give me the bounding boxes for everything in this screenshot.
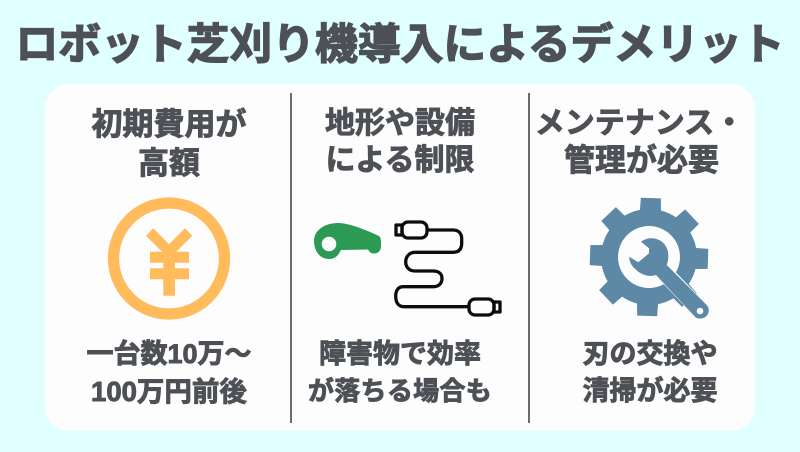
heading: initial cost: 初期費用が [92, 107, 246, 142]
text: obstacles: 障害物で効率 [319, 339, 481, 369]
heading: maintenance: メンテナンス・ [535, 107, 744, 140]
text: obstacles: が落ちる場合も [308, 376, 492, 406]
title: ロボット芝刈り機導入によるデメリット [15, 21, 785, 69]
heading: maintenance [535, 107, 744, 178]
text: price range [86, 338, 252, 407]
heading: terrain and equipment [325, 106, 475, 177]
icon: gear and wrench [590, 198, 709, 318]
heading: terrain and equipment: による制限 [325, 144, 475, 177]
panel: white card [45, 84, 755, 431]
column divider left [290, 93, 292, 423]
icon: yen coin [108, 197, 230, 320]
heading: maintenance: 管理が必要 [564, 143, 719, 178]
text: blade care [582, 339, 718, 406]
heading: initial cost: 高額 [138, 146, 200, 181]
heading: terrain and equipment: 地形や設備 [325, 107, 475, 140]
text: blade care: 刃の交換や [582, 339, 718, 369]
text: price range: 一台数10万～ [86, 339, 252, 369]
text: price range: 100万円前後 [91, 376, 247, 407]
text: obstacles [308, 339, 492, 406]
heading: initial cost [91, 107, 246, 181]
icon: green hook and cable [314, 220, 502, 317]
column divider right [528, 93, 530, 423]
text: blade care: 清掃が必要 [582, 376, 718, 406]
